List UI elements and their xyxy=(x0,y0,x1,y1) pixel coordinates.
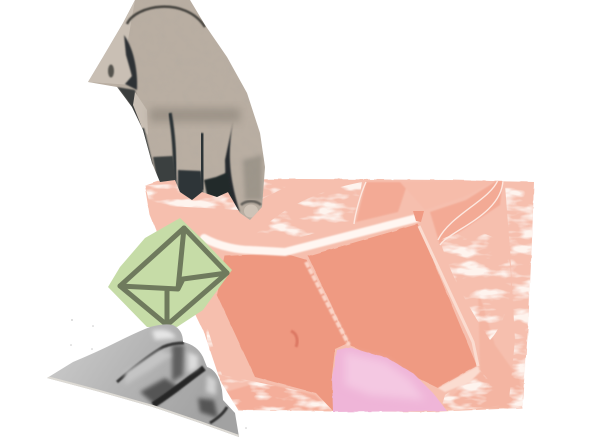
icon: envelope on green tag xyxy=(108,218,232,327)
cuff xyxy=(88,0,135,85)
envelope flap lines xyxy=(120,228,227,325)
thumb nail xyxy=(244,204,258,218)
cuff button xyxy=(108,64,114,78)
pink hand holding book xyxy=(332,347,447,412)
finger creases xyxy=(117,343,184,382)
book page mark xyxy=(291,331,297,347)
dark fingertips xyxy=(153,156,177,185)
book centre gutter xyxy=(306,262,349,345)
shadow between cuff and hand xyxy=(124,35,137,90)
knuckle smudges xyxy=(150,108,240,122)
hand pointing down xyxy=(85,0,270,225)
book torn bottom edge xyxy=(438,366,480,392)
torn paper bottom edge xyxy=(47,378,239,437)
finger shading xyxy=(172,345,184,382)
book right edge xyxy=(419,226,478,366)
fist holding envelope xyxy=(47,324,239,437)
book xyxy=(204,211,480,412)
envelope outline xyxy=(120,228,227,325)
book left page xyxy=(217,253,348,412)
panel: pink textured background paper xyxy=(145,179,534,412)
finger shadow lines xyxy=(170,113,175,180)
paper grain xyxy=(85,0,270,225)
paper specks xyxy=(70,319,247,429)
book top corner xyxy=(413,211,424,222)
highlights xyxy=(152,330,176,340)
green tag xyxy=(108,218,232,327)
darker paper folds xyxy=(225,180,522,410)
thumb shading xyxy=(243,155,262,200)
book spine top edge xyxy=(204,218,417,252)
book right page xyxy=(308,224,477,388)
wrist edge xyxy=(117,87,143,130)
pale swirl texture xyxy=(145,180,534,412)
